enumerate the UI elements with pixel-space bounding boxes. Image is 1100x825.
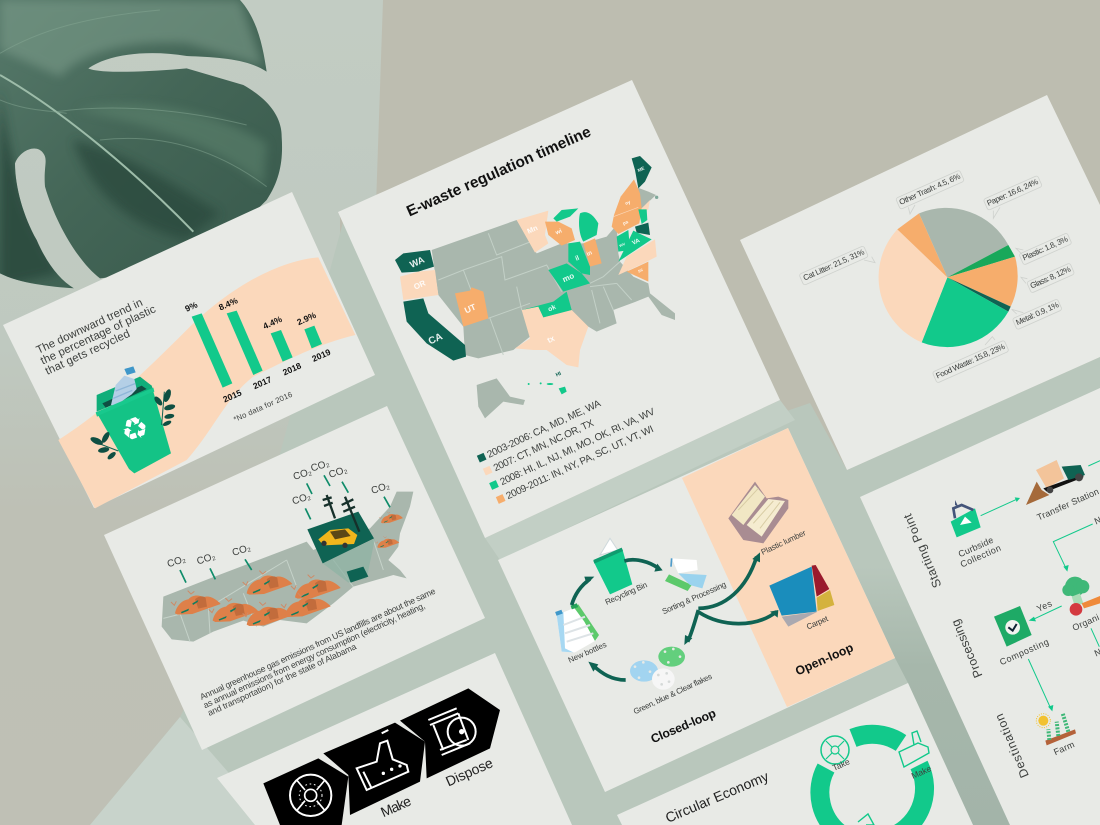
closed-loop and open-loop labels: Carpet: [805, 614, 830, 631]
US state map: wv: [617, 241, 626, 248]
bar chart: 2019: [310, 347, 332, 364]
legend: 2008: HI, IL, NJ, MI, MO, OK, RI, VA, WV: [499, 406, 657, 488]
panel: plastic recycling trend: [3, 192, 375, 508]
Hawaii: HI: [555, 371, 563, 378]
decorative monstera leaf: [0, 0, 300, 300]
closed-loop and open-loop labels: Sorting & Processing: [661, 580, 728, 616]
closed-loop and open-loop labels: New bottles: [567, 640, 608, 665]
pie callout labels: Paper: 16.6, 24%: [985, 177, 1040, 208]
bar chart: 2.9%: [295, 310, 318, 327]
section labels: Processing: [948, 617, 985, 680]
flow arrows: [1028, 461, 1100, 708]
US state map: CA: [427, 331, 444, 347]
US state map: in: [586, 250, 594, 258]
pie callout labels: [799, 170, 1075, 383]
section labels: Destination: [992, 711, 1032, 780]
bar chart: 9%: [183, 299, 199, 314]
US state map: [395, 156, 675, 418]
CO2 labels: CO₂: [310, 458, 331, 475]
US state map: OR: [412, 278, 427, 292]
closed-loop and open-loop labels: [567, 528, 830, 716]
labels: Composting: [998, 637, 1050, 667]
label: make: Make: [378, 792, 414, 820]
icon: new bottles: [555, 603, 599, 652]
section labels: Starting Point: [900, 511, 944, 590]
label: dispose: Dispose: [443, 754, 495, 789]
panel: e-waste regulation timeline: [338, 80, 780, 538]
pie callout labels: Cat Litter: 21.5, 31%: [802, 247, 866, 282]
bar chart: 2015: [221, 387, 243, 404]
panel: closed loop and open loop recycling: [498, 428, 895, 792]
pie chart: [879, 208, 1018, 347]
US state map: sc: [637, 267, 644, 274]
labels: Transfer Station: [1035, 486, 1100, 522]
panel: landfill greenhouse gas emissions: [104, 406, 485, 750]
peach wave band: [58, 257, 355, 508]
icon: recycling bin with bottle: ♻: [116, 409, 154, 451]
caption: and transportation) for the state of Alabama: [206, 641, 358, 718]
icon: sorted plastics: [665, 558, 707, 591]
panel: circular economy: [617, 683, 973, 825]
labels: Curbside: [957, 535, 995, 559]
icon: recycle: [858, 814, 874, 825]
US state map: ok: [547, 304, 557, 313]
icon: transfer station truck: [1026, 460, 1085, 505]
pie callout labels: Other Trash: 4.5, 6%: [898, 172, 962, 207]
closed-loop and open-loop labels: Recycling Bin: [604, 580, 649, 607]
US state map: tx: [546, 334, 557, 345]
pie callout labels: Food Waste: 15.8, 23%: [934, 342, 1006, 380]
pie callout labels: Plastic: 1.8, 3%: [1021, 234, 1069, 262]
US state map: pa: [622, 219, 629, 226]
heading: Circular Economy: [663, 768, 771, 825]
US map with landfills: [162, 492, 413, 642]
icon: curbside collection: [951, 500, 981, 537]
highlighted Alabama block with car and towers: [307, 495, 375, 583]
labels: [957, 486, 1100, 757]
US state map: il: [574, 255, 581, 263]
icon: farm: [1036, 713, 1076, 745]
heading: the percentage of plastic: [39, 303, 158, 367]
icon: organics vegetables: [1062, 577, 1100, 616]
loop arrows: [572, 557, 777, 680]
Alaska: [477, 378, 525, 418]
CO2 labels: CO₂: [291, 491, 312, 508]
panel: linear economy take make dispose: [217, 653, 572, 825]
US state map: ny: [624, 199, 632, 206]
CO2 labels: CO₂: [196, 551, 217, 568]
panel: waste composition pie chart: [740, 95, 1100, 470]
chevron: make: [323, 723, 425, 815]
CO2 labels: CO₂: [166, 554, 187, 570]
bar chart: 2017: [251, 374, 273, 391]
CO2 labels: CO₂: [292, 467, 313, 483]
heading: that gets recycled: [44, 328, 132, 378]
heading: The downward trend in: [35, 297, 145, 357]
icon: recycling bin: [593, 538, 632, 594]
closed-loop and open-loop labels: Plastic lumber: [760, 528, 808, 557]
labels: Farm: [1052, 739, 1076, 757]
US state map: VA: [631, 238, 642, 247]
labels: Collection: [959, 543, 1002, 569]
closed-loop and open-loop labels: Green, blue & Clear flakes: [632, 672, 713, 716]
US state map: UT: [463, 301, 478, 316]
caption: as annual emissions from energy consumption (electricity, heating,: [202, 600, 427, 710]
legend: 2003-2006: CA, MD, ME, WA: [486, 398, 603, 461]
open-loop peach column: [682, 428, 895, 707]
legend: 2009-2011: IN, NY, PA, SC, UT, VT, WI: [505, 424, 655, 502]
US state map: mo: [561, 271, 576, 284]
bar chart: 2018: [281, 360, 303, 377]
section labels: [900, 511, 1032, 780]
panel: closed loop and open loop recycling: Closed-loop: [649, 706, 718, 746]
icon: plastic lumber bench: [728, 482, 788, 543]
panel: organic waste flow chart: [860, 388, 1100, 825]
CO2 labels: [166, 458, 391, 570]
Hawaii: [528, 371, 567, 394]
legend: 2007: CT, MN, NC,OR, TX: [492, 418, 596, 474]
panel: closed loop and open loop recycling: Open-loop: [793, 640, 856, 678]
chevron: take: [263, 758, 348, 825]
bar chart: [183, 295, 332, 404]
icon: carpet samples: [769, 565, 834, 627]
bar chart: 8.4%: [217, 295, 239, 312]
ring diagram: [820, 734, 925, 825]
CO2 labels: CO₂: [370, 481, 391, 497]
icon: take: [821, 736, 851, 773]
bar chart: 4.4%: [261, 314, 284, 331]
icon: compost bag: [994, 606, 1032, 647]
US state map: ME: [637, 166, 645, 173]
icon: make: [899, 731, 933, 781]
icon: plastic flakes: [630, 647, 685, 690]
chevron: dispose: [400, 688, 500, 778]
pie callout labels: Glass: 8, 12%: [1029, 265, 1072, 290]
pie callout labels: Metal: 0.9, 1%: [1014, 300, 1060, 327]
arrow: [981, 499, 1017, 516]
footnote: *No data for 2016: [232, 390, 294, 424]
icon: make: Make: [910, 763, 933, 781]
icon: take: Take: [831, 756, 851, 773]
heading: E-waste regulation timeline: [404, 123, 594, 220]
US state map: WA: [408, 255, 426, 270]
CO2 labels: CO₂: [231, 543, 252, 559]
legend: [477, 398, 657, 504]
labels: Yes: [1035, 598, 1054, 614]
US state map: Mn: [526, 223, 539, 236]
labels: Organi: [1071, 612, 1100, 633]
US state map: wi: [554, 228, 563, 237]
CO2 labels: CO₂: [328, 465, 349, 481]
icon: recycling bin with bottle: [89, 366, 176, 473]
caption: Annual greenhouse gas emissions from US landfills are about the same: [198, 586, 437, 702]
